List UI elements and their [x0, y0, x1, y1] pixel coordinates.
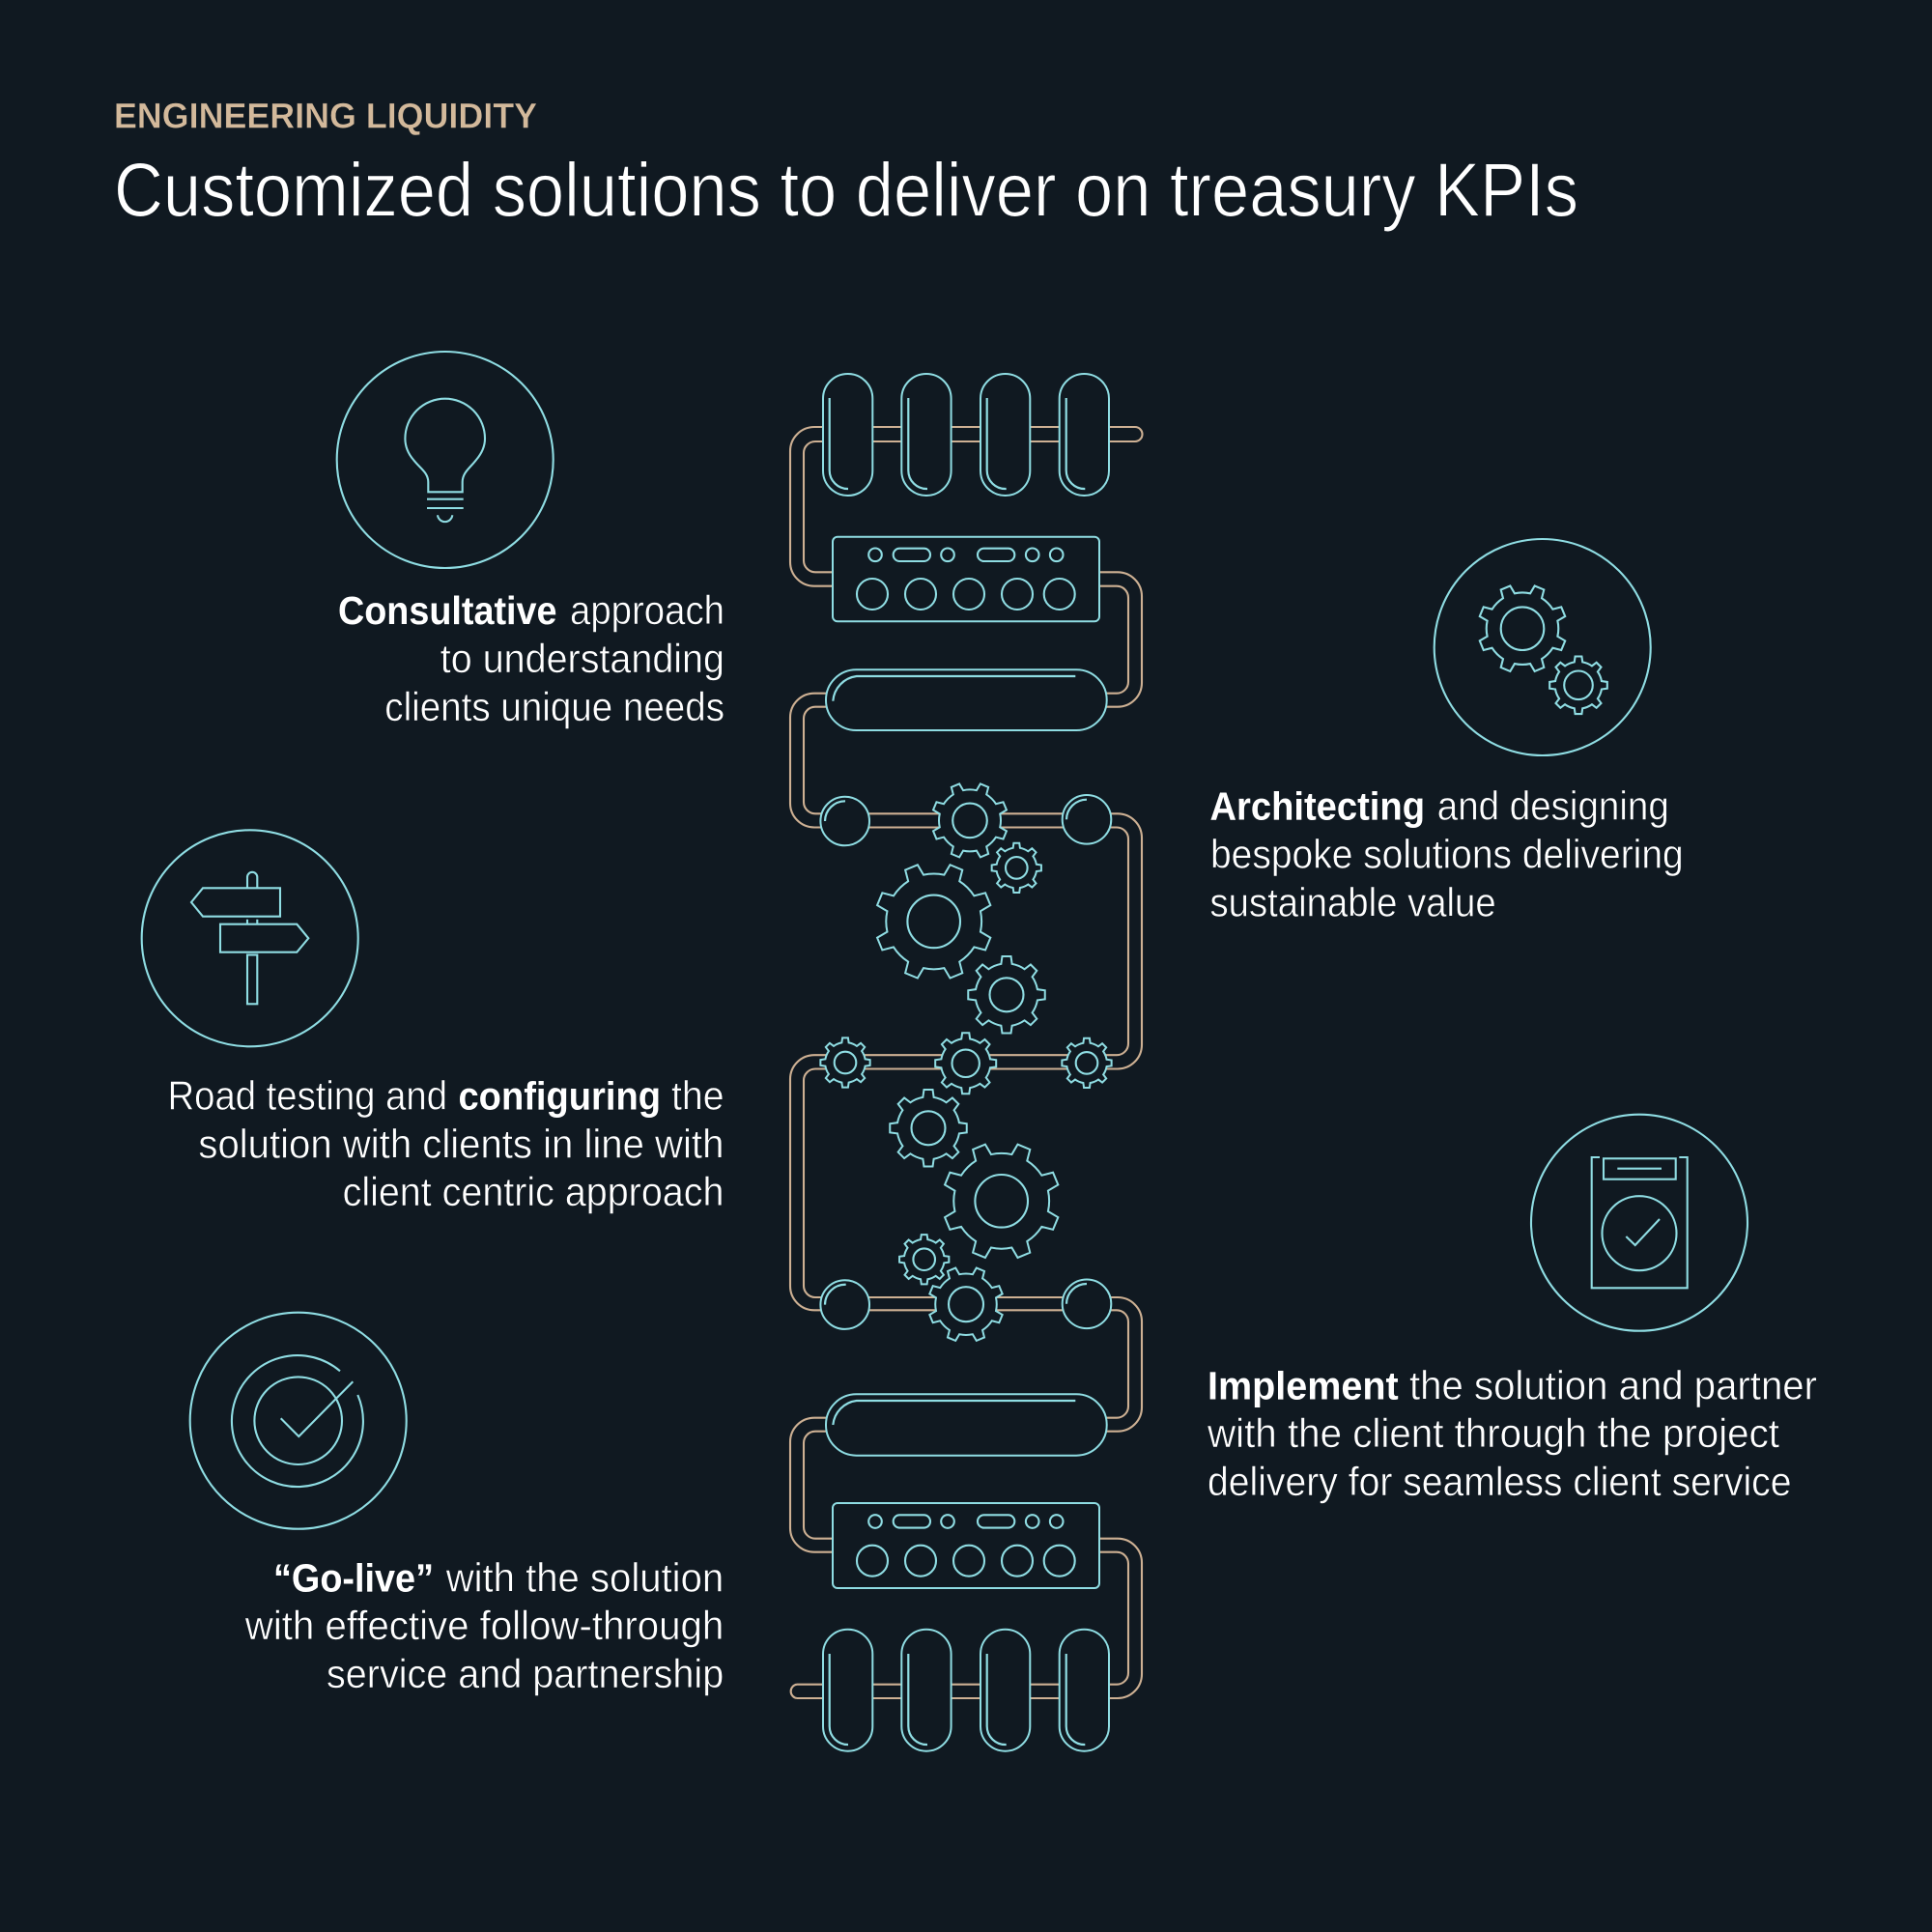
text: architecting: and designing: [1437, 783, 1669, 829]
text: consultative: clients unique needs: [384, 684, 724, 729]
gear 5: [820, 1037, 870, 1088]
gear 6: [935, 1033, 996, 1094]
gear 3 big: [858, 845, 1010, 998]
text: implement: the solution and partner: [1409, 1362, 1817, 1407]
text: go-live: with effective follow-through: [244, 1603, 724, 1648]
ball left lower: [820, 1280, 869, 1329]
ball right lower: [1063, 1279, 1111, 1328]
text: go-live: service and partnership: [327, 1651, 724, 1696]
text: configuring: [168, 1073, 724, 1214]
gear 9 big: [925, 1124, 1078, 1277]
text: architecting: bespoke solutions delivering: [1210, 832, 1684, 877]
gear 4: [968, 956, 1045, 1034]
text: architecting: sustainable value: [1209, 880, 1496, 925]
gear 1: [921, 771, 1019, 870]
icon: target check: [190, 1313, 407, 1529]
bottom pills: [823, 1630, 1109, 1751]
machine diagram: [790, 374, 1142, 1751]
text: configuring: solution with clients in line with: [198, 1121, 724, 1167]
text: architecting: Architecting: [1209, 784, 1425, 829]
text: implement: delivery for seamless client service: [1208, 1459, 1791, 1504]
text: configuring: Road testing and: [168, 1073, 447, 1119]
text: go-live: [244, 1554, 724, 1696]
text: consultative: [338, 587, 724, 729]
gear 8: [890, 1090, 967, 1167]
text: configuring: the: [671, 1073, 724, 1119]
icon: signpost: [142, 830, 358, 1046]
text: implement: with the client through the project: [1207, 1410, 1779, 1456]
icon: light bulb: [337, 352, 554, 568]
text: architecting: [1209, 783, 1684, 925]
text: implement: Implement: [1208, 1363, 1399, 1407]
text: consultative: approach: [570, 587, 724, 633]
text: go-live: “Go-live”: [273, 1555, 434, 1600]
icon: clipboard check: [1531, 1115, 1747, 1331]
top capsule: [826, 669, 1107, 730]
top pills: [823, 374, 1109, 496]
serpentine pipe: [790, 427, 1142, 1698]
gear 10: [899, 1235, 949, 1284]
text: consultative: Consultative: [338, 588, 556, 633]
bottom capsule: [826, 1394, 1107, 1456]
text: consultative: to understanding: [440, 636, 724, 681]
text: configuring: configuring: [458, 1074, 661, 1119]
ball right upper: [1063, 795, 1111, 844]
top control panel: [833, 537, 1099, 621]
gear 11: [917, 1255, 1015, 1353]
text: configuring: client centric approach: [343, 1169, 724, 1214]
gear 7: [1062, 1038, 1112, 1088]
bottom control panel: [833, 1503, 1099, 1588]
gear 2: [992, 843, 1041, 893]
title: Customized solutions to deliver on treasury KPIs: [114, 146, 1578, 232]
icon: two gears: [1435, 539, 1651, 755]
text: go-live: with the solution: [445, 1554, 724, 1600]
text: implement: [1207, 1362, 1817, 1504]
ball left upper: [820, 797, 869, 845]
eyebrow heading: ENGINEERING LIQUIDITY: [114, 96, 537, 136]
